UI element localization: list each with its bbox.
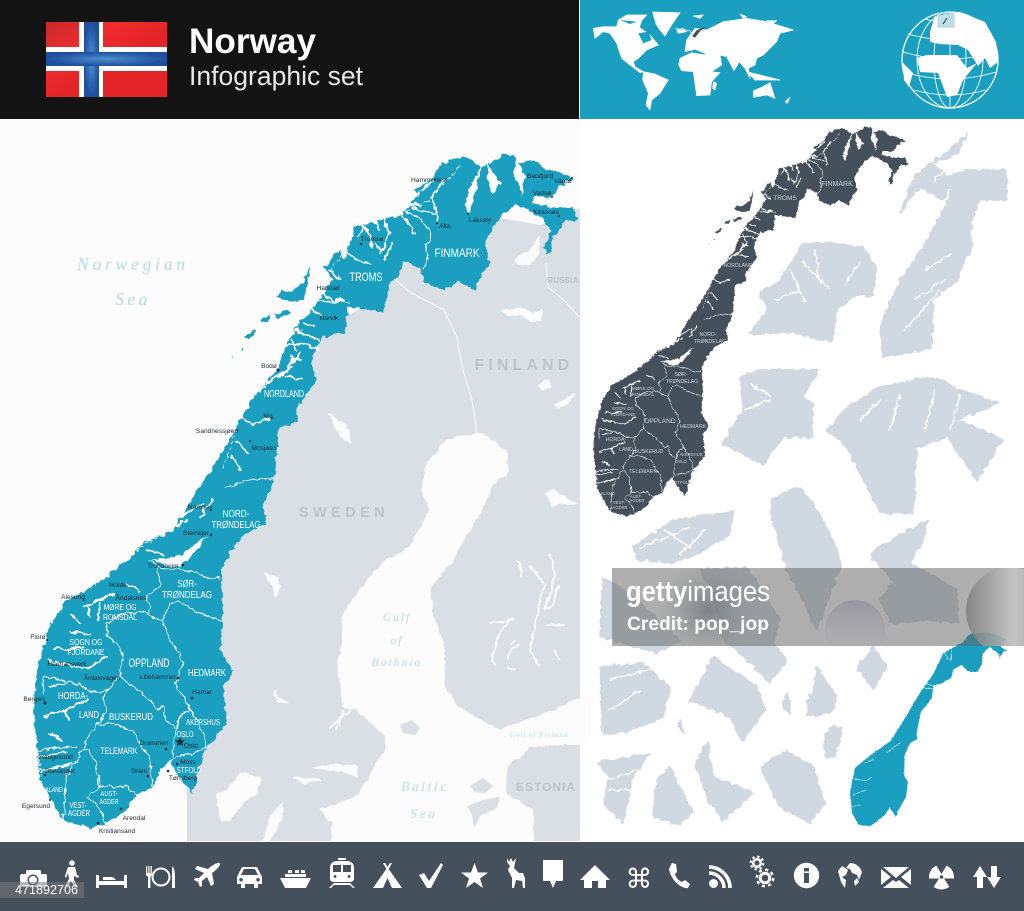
city labels on main map: Vadsø (533, 190, 551, 197)
city labels on main map: Haugesund (39, 754, 73, 761)
sea labels: Sea (410, 806, 438, 821)
country labels: FINLAND (475, 357, 573, 374)
city labels on main map (22, 173, 572, 835)
city labels on main map: Molde (109, 582, 127, 589)
city markers (44, 177, 573, 824)
region labels on dark map: NORD- (699, 332, 717, 338)
region labels on dark map: HEDMARK (680, 424, 707, 430)
region labels on main map: NORDLAND (264, 389, 304, 400)
islands (400, 720, 500, 828)
city labels on main map: Bodø (261, 363, 277, 370)
map: small Norway teal silhouette (850, 632, 1008, 826)
icon: airplane (194, 863, 220, 887)
city labels on main map: Hamar (192, 689, 213, 696)
region labels on dark map: TROMS (773, 195, 797, 202)
region labels on main map: AKERSHUS (186, 718, 220, 727)
footer bar (0, 842, 1024, 911)
watermark text: gettyimages (626, 576, 770, 608)
region labels on main map: FJORDANE (68, 647, 105, 657)
city labels on main map: Hermansverk (47, 661, 87, 668)
sea labels: Gulf (383, 612, 411, 624)
icon: train (329, 858, 355, 888)
city labels on main map: Trondheim (147, 563, 179, 570)
city labels on main map: Oslo (184, 743, 198, 750)
region labels on dark map: GALAND (597, 491, 615, 496)
city labels on main map: Tromsø (361, 236, 383, 243)
region labels on main map: TRØNDELAG (212, 520, 261, 531)
city labels on main map: Bergen (23, 696, 45, 703)
icon: gears (751, 857, 773, 886)
region labels on main map: AGDER (68, 809, 90, 818)
country labels (299, 276, 579, 794)
city labels on main map: Stavanger (45, 768, 76, 775)
sea labels: Sea (115, 289, 151, 309)
icon: envelope (881, 867, 911, 888)
region labels on dark map: LAND (619, 447, 633, 453)
borders Sweden, Finland and Russia (392, 263, 579, 433)
region labels on dark map: FJORDANE (611, 412, 635, 417)
sea labels: Gulf of Finland (510, 731, 568, 739)
region labels on main map: LAND (79, 710, 99, 721)
region labels on dark map: AKERSHUS (679, 452, 703, 457)
city labels on main map: Skien (131, 768, 148, 775)
icon: radiation (929, 864, 954, 890)
city labels on main map: Drammen (140, 740, 169, 747)
region labels on main map: HEDMARK (188, 668, 226, 679)
icon: information (794, 863, 819, 888)
country labels: ESTONIA (516, 780, 576, 794)
icon: ship (280, 870, 311, 888)
region labels on dark map: MØRE OG (632, 386, 655, 391)
region labels on main map: HORDA- (58, 691, 88, 702)
region labels on main map: TRØNDELAG (162, 590, 212, 601)
region labels on main map: ROMSDAL (103, 612, 137, 622)
subtitle: Infographic set (189, 61, 363, 91)
icon: bed (96, 875, 127, 888)
city labels on main map: Tønsberg (169, 775, 197, 782)
sea labels (76, 254, 568, 821)
city labels on main map: Alesund (61, 594, 85, 601)
panel: main map background (0, 120, 580, 841)
region labels on dark map: STFOLD (675, 480, 691, 485)
city labels on main map: Moss (180, 759, 197, 766)
city labels on main map: Sandnessjøen (196, 428, 238, 435)
region labels on main map: TROMS (350, 270, 382, 284)
icon: up and down arrows (973, 866, 1001, 888)
region labels on main map: NORD- (222, 509, 250, 520)
icon: house (580, 865, 610, 888)
region labels on dark map: BUSKERUD (635, 449, 664, 455)
region labels on main map: AGDER (100, 797, 119, 806)
city labels on main map: Egersund (22, 803, 50, 810)
region labels on main map: BUSKERUD (109, 712, 153, 723)
map: Norway dark grey with regions (593, 126, 908, 516)
globe (902, 12, 998, 108)
region labels on dark map: AUST- (630, 494, 643, 499)
city labels on main map: Narvik (320, 315, 339, 322)
map: Norway regions teal (33, 153, 578, 828)
city labels on main map: Kristiansand (99, 828, 135, 835)
icon: reindeer (507, 858, 525, 888)
region labels on dark map: OSLO (675, 459, 688, 464)
watermark: credit band: Credit: pop_jop (627, 614, 769, 635)
region labels on main map: GALAND (41, 785, 63, 794)
header: blue panel (580, 0, 1024, 119)
icon: car (237, 867, 262, 888)
region labels on dark map: AGDER (630, 498, 644, 503)
country labels: RUSSIA (547, 276, 579, 285)
region labels on dark map: FINMARK (821, 181, 853, 188)
region labels on main map: VEST- (70, 801, 87, 810)
icon: tent (373, 863, 402, 888)
city labels on main map: Kirkenes (533, 209, 560, 216)
icon: camera (20, 870, 47, 887)
watermark: credit band (612, 568, 1024, 646)
icon: globe (838, 863, 862, 888)
city labels on main map: Alta (439, 223, 451, 230)
city labels on main map: Arendal (123, 815, 146, 822)
region labels on main map: MØRE OG (104, 602, 136, 612)
icon: telephone (669, 863, 690, 888)
icon: star (461, 863, 488, 888)
city labels on main map: Namsos (188, 504, 213, 511)
icon: walking person (65, 860, 79, 888)
city labels on main map: Harstad (316, 285, 340, 292)
region labels on main map (41, 246, 480, 818)
city labels on main map: Hammerfest (411, 177, 447, 184)
gulf of Bothnia and Baltic Sea (320, 433, 590, 860)
city labels on main map: Vardø (554, 178, 572, 185)
city labels on main map: Åndalsnes (116, 593, 147, 602)
region labels on dark map: TRØNDELAG (694, 339, 726, 345)
world map (593, 12, 793, 110)
city labels on main map: Mo (263, 413, 273, 420)
region labels on dark map: TRØNDELAG (666, 379, 698, 385)
region labels on dark map (597, 181, 853, 510)
region labels on main map: FINMARK (434, 246, 480, 260)
watermark: image id: 471892706 (15, 883, 78, 897)
region labels on main map: SOGN OG (70, 637, 102, 647)
sea labels: of (391, 635, 403, 647)
region labels on dark map: NORDLAND (723, 263, 753, 269)
region labels on dark map: VEST- (613, 500, 626, 505)
city labels on main map: Steinkjer (183, 530, 210, 537)
icon: check mark (419, 863, 443, 888)
icon: plate and cutlery (146, 866, 175, 888)
sea labels: Baltic (401, 779, 449, 794)
region labels on dark map: SOGN OG (612, 406, 634, 411)
icon: flag of Norway (46, 22, 167, 97)
watermark: image id (0, 882, 84, 898)
region labels on main map: TELEMARK (100, 746, 138, 756)
country labels: SWEDEN (299, 505, 389, 521)
city labels on main map: Laksely (469, 217, 492, 224)
icon: command key: ⌘ (626, 864, 652, 895)
region labels on dark map: OPPLAND (644, 418, 676, 425)
city labels on main map: Mosjøen (251, 445, 277, 452)
region labels on dark map: HORDA- (606, 437, 626, 443)
city labels on main map: Batsfjord (527, 173, 553, 180)
region labels on main map: OSLO (176, 730, 194, 739)
region labels on main map: SØR- (178, 579, 196, 590)
title: Norway (189, 22, 317, 61)
region labels on dark map: ROMSDAL (632, 392, 655, 397)
sea labels: Bothnia (372, 657, 422, 669)
sea labels: Norwegian (76, 254, 189, 274)
region labels on main map: STFOLD (176, 766, 202, 775)
icon: RSS feed (709, 867, 730, 888)
icon: map pin marker (543, 860, 563, 888)
lakes (217, 237, 577, 841)
footer icons (20, 857, 1001, 895)
city labels on main map: Lillehammer (140, 674, 177, 681)
region labels on main map: AUST- (100, 789, 118, 798)
city labels on main map: Florø (30, 634, 46, 641)
header: dark title panel (0, 0, 579, 119)
region labels on main map: OPPLAND (128, 656, 170, 670)
region labels on dark map: TELEMARK (629, 469, 658, 475)
map: neighbouring countries (185, 208, 590, 860)
region labels on dark map: SØR- (675, 372, 688, 378)
right panel: grey detail region shapes (597, 133, 1007, 825)
city labels on main map: Årdalsvagen (84, 673, 121, 682)
region labels on dark map: AGDER (613, 505, 627, 510)
